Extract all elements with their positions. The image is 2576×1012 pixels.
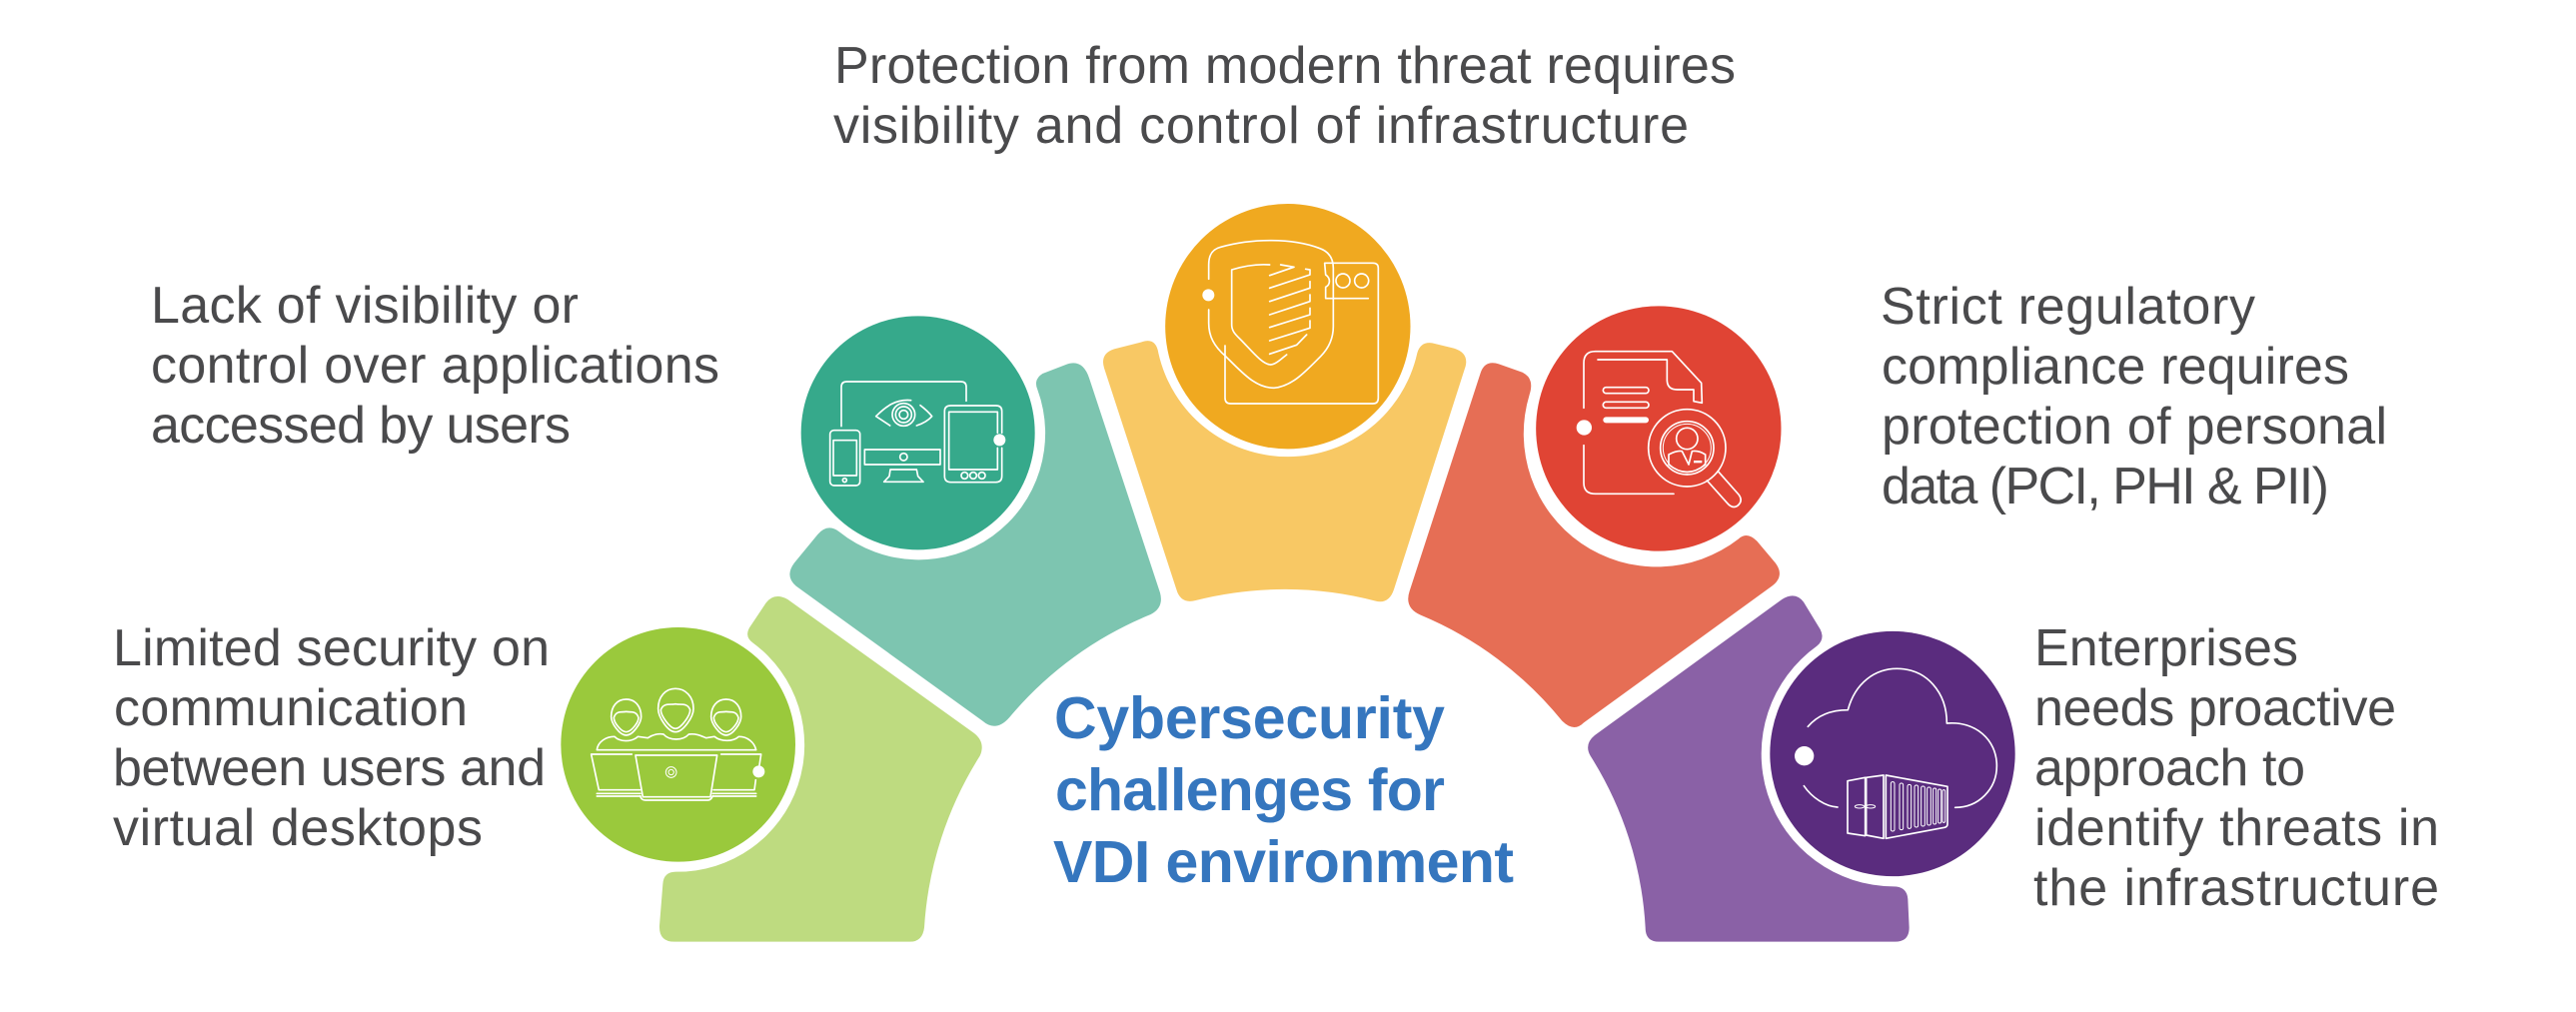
text block: enterprises proactive approach: approach to	[2034, 739, 2305, 797]
text block: strict regulatory compliance: protection of personal	[1882, 398, 2387, 456]
text block: strict regulatory compliance: compliance requires	[1882, 338, 2349, 396]
panel: modern threat protection (yellow)	[1103, 204, 1466, 601]
text block: lack of visibility: Lack of visibility or	[151, 277, 579, 335]
text block: strict regulatory compliance	[1881, 278, 2387, 515]
text block: enterprises proactive approach	[2033, 619, 2439, 917]
heading: centre title: Cybersecurity	[1054, 685, 1445, 751]
circle: purple	[1770, 631, 2015, 876]
text block: protection from modern threat	[833, 37, 1736, 155]
text block: strict regulatory compliance: Strict regulatory	[1881, 278, 2255, 336]
text block: strict regulatory compliance: data (PCI, PHI & PII)	[1882, 458, 2329, 515]
text block: lack of visibility	[151, 277, 719, 455]
circle: teal	[801, 316, 1035, 549]
text block: limited security: communication	[114, 679, 468, 737]
text block: protection from modern threat: visibility and control of infrastructure	[833, 97, 1689, 155]
text block: lack of visibility: accessed by users	[151, 397, 571, 455]
segment: yellow	[1103, 341, 1466, 601]
panel: proactive threat detection (purple)	[1588, 595, 2015, 942]
icon: cloud and container	[1795, 668, 1996, 838]
text block: enterprises proactive approach: needs proactive	[2034, 679, 2396, 737]
text block: enterprises proactive approach: Enterprises	[2034, 619, 2298, 677]
text block: limited security: between users and	[113, 739, 546, 797]
heading: centre title: VDI environment	[1053, 829, 1514, 895]
segment: green	[659, 596, 982, 942]
text block: lack of visibility: control over applications	[151, 337, 719, 395]
panel: limited security (green)	[561, 596, 982, 942]
text block: protection from modern threat: Protection from modern threat requires	[834, 37, 1736, 95]
icon: document and magnifier	[1577, 352, 1741, 506]
icon: devices with eye	[830, 382, 1005, 486]
text block: limited security: Limited security on	[113, 619, 550, 677]
circle: yellow	[1165, 204, 1410, 449]
circle: red	[1536, 306, 1781, 551]
text block: limited security: virtual desktops	[113, 799, 483, 857]
heading: centre title: challenges for	[1055, 757, 1445, 823]
segment: red	[1408, 363, 1780, 727]
panel: regulatory compliance (red)	[1408, 306, 1781, 727]
text block: enterprises proactive approach: identify threats in	[2034, 799, 2439, 857]
segment: purple	[1588, 595, 1910, 942]
icon: users at laptops	[592, 688, 764, 800]
icon: shield and infrastructure box	[1202, 241, 1378, 404]
panel: visibility of applications (teal)	[789, 316, 1161, 726]
segment: teal	[789, 363, 1161, 726]
circle: green	[561, 627, 795, 862]
text block: enterprises proactive approach: the infrastructure	[2033, 859, 2439, 917]
heading: centre title	[1053, 685, 1514, 895]
text block: limited security	[113, 619, 550, 857]
